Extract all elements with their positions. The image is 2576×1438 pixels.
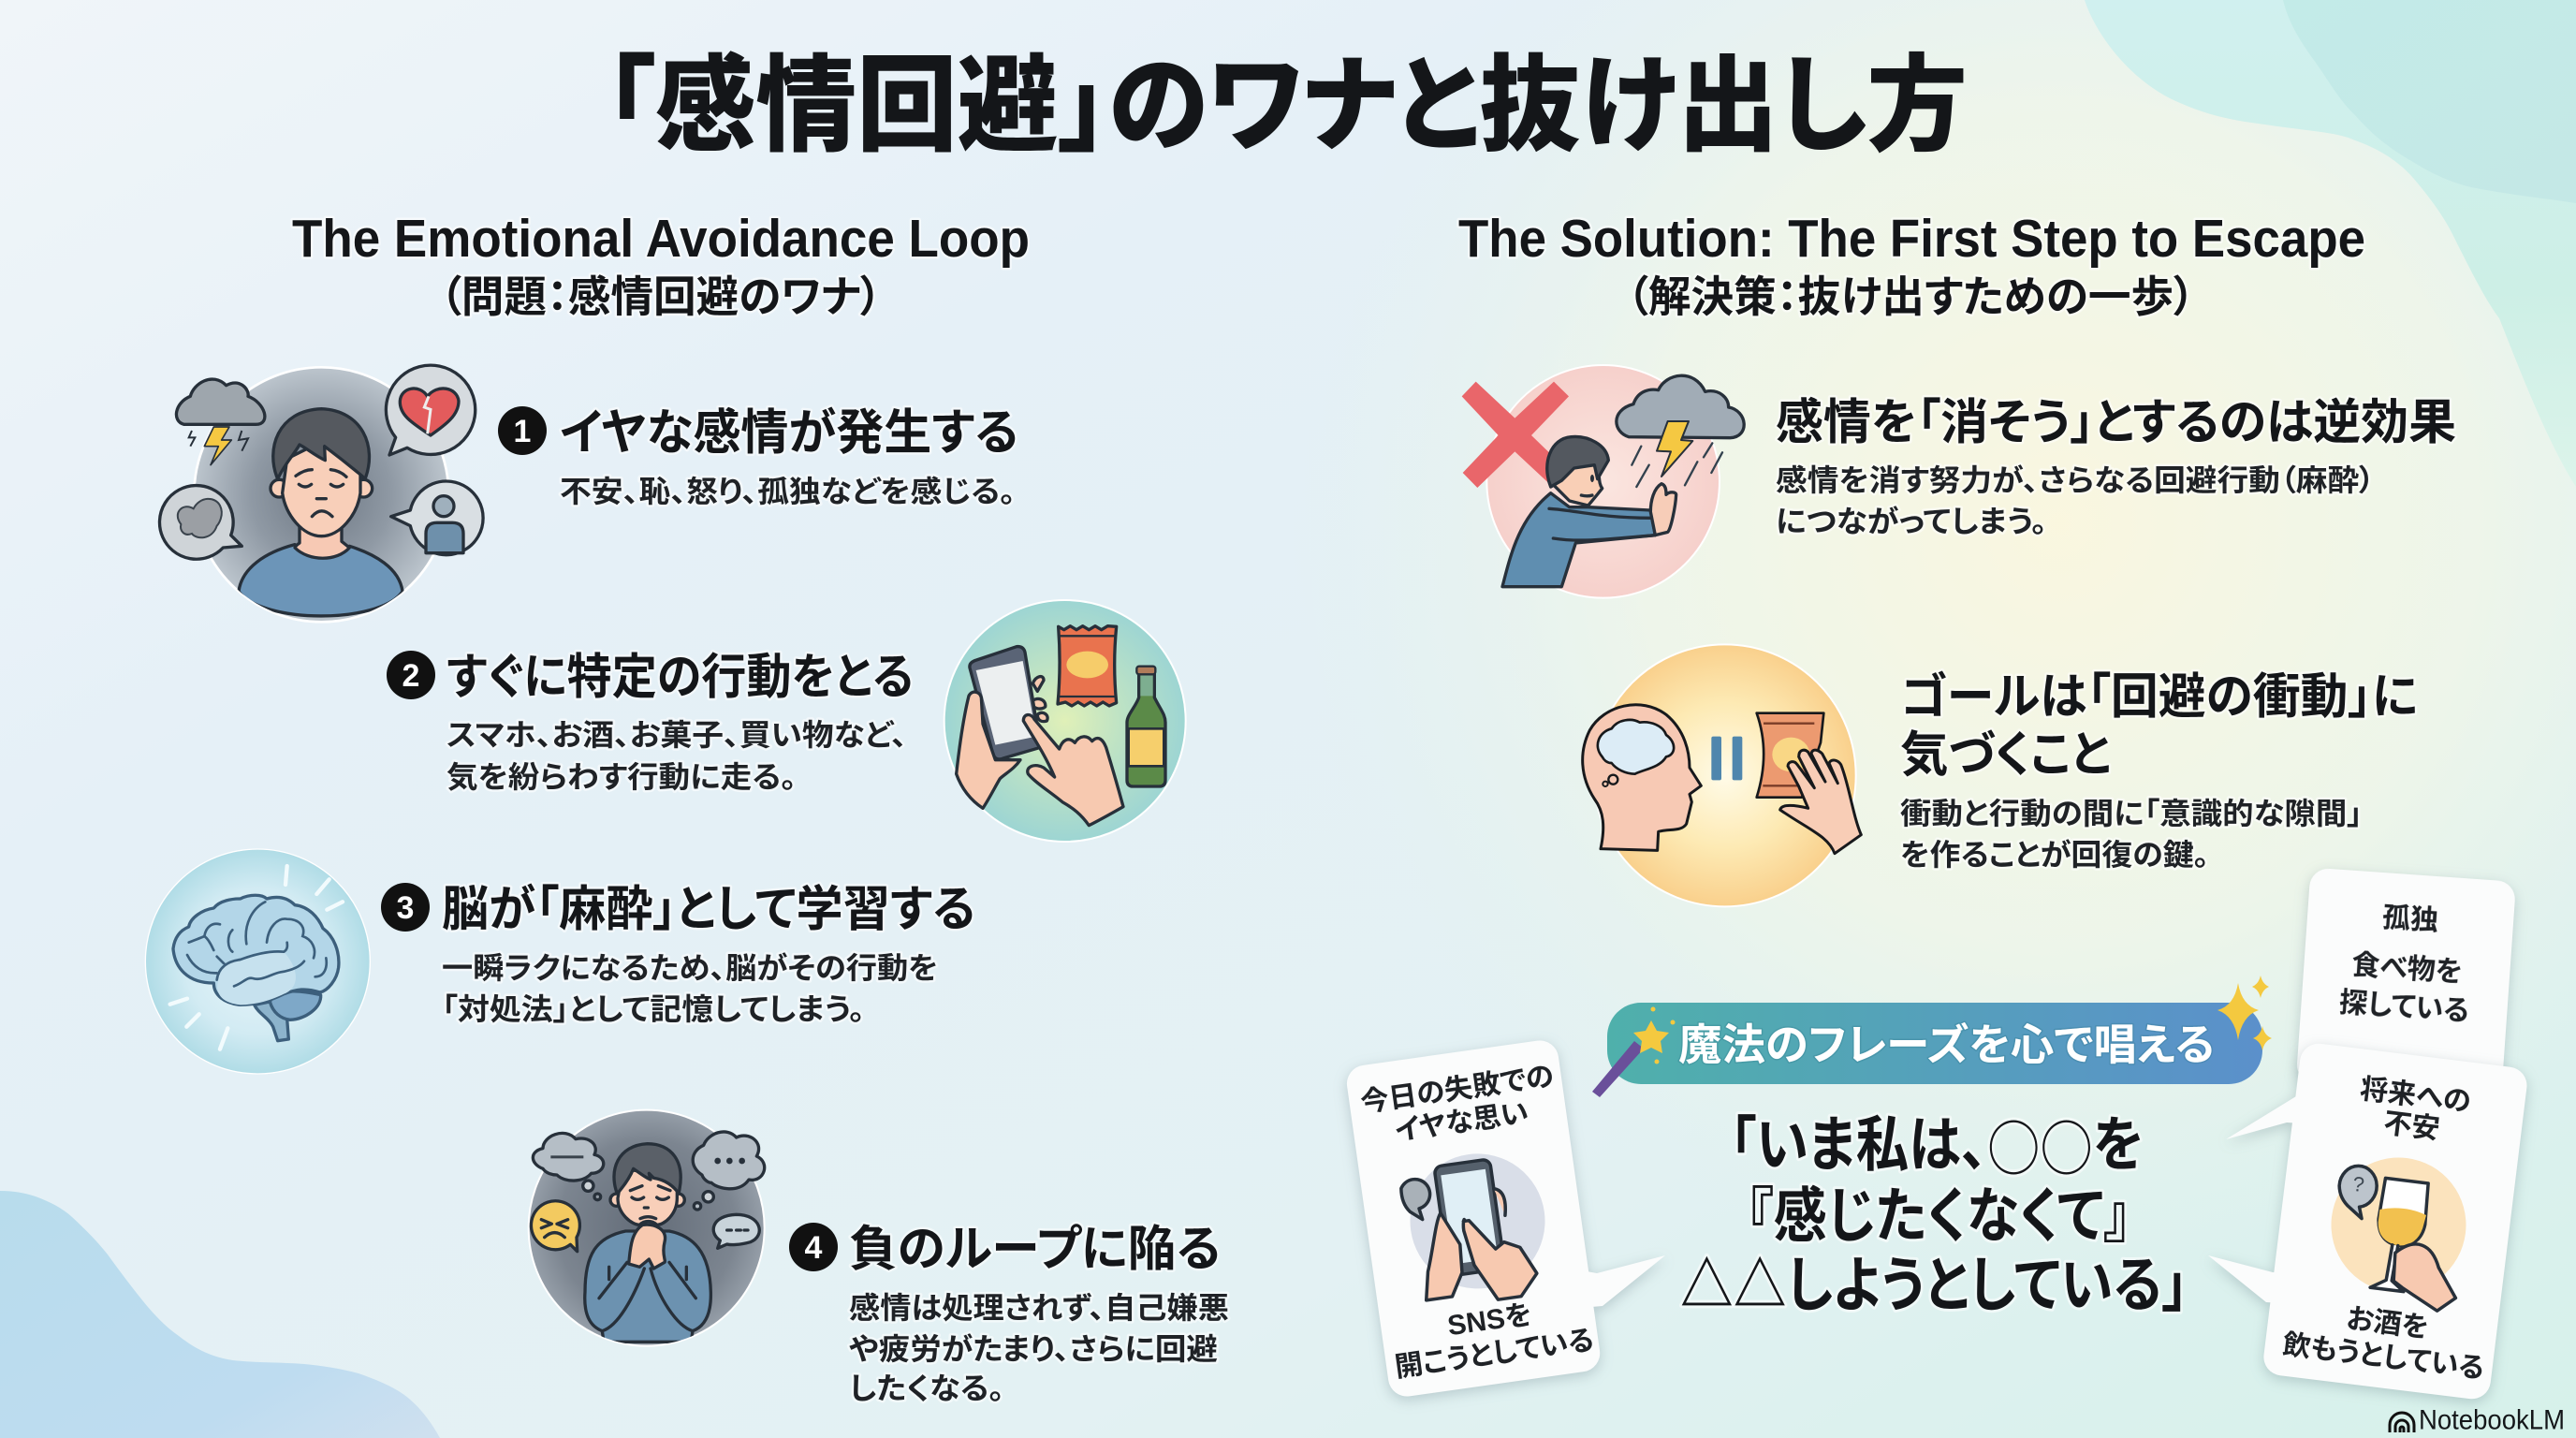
hand [1780,750,1861,854]
callout tails: right card [2208,1096,2310,1303]
card: alcohol example: 不安 [2382,1108,2441,1145]
magic phrase quote: △△しようとしている」 [1680,1252,2188,1319]
icon: wine glass in hand: ? [2351,1172,2365,1196]
solution 1 description: 感情を消す努力が、さらなる回避行動（麻酔） [1776,463,2375,497]
panel: step 2 [387,600,1186,842]
magic phrase quote [1680,1102,2188,1319]
step 4 description: や疲労がたまり、さらに回避 [849,1332,1218,1366]
step 3 description [442,951,938,1026]
step 2 heading: すぐに特定の行動をとる [446,651,914,705]
banner: magic phrase [1592,976,2272,1097]
number badge 3 [381,883,430,932]
left section heading: （問題：感情回避のワナ） [440,272,882,321]
solution 2 description: 衝動と行動の間に「意識的な隙間」 [1900,797,2363,830]
callout tail: left card [1587,1255,1665,1307]
step 1 description: 不安、恥、怒り、孤独などを感じる。 [560,475,1016,508]
bottle [1127,667,1165,786]
icon: broken heart bubble [386,365,476,455]
solution 1 heading: 感情を「消そう」とするのは逆効果 [1776,396,2456,450]
step 2 description [446,718,907,794]
card: loneliness (back): 孤独 [2381,902,2439,937]
right section heading: The Solution: The First Step to Escape [1458,209,2365,269]
card: SNS example: SNSを [1445,1299,1534,1342]
panel: solution 2 [1583,644,2418,906]
step 3 description: 「対処法」として記憶してしまう。 [442,992,865,1026]
title: 「感情回避」のワナと抜け出し方 [605,47,1968,165]
number badge 2 [387,651,435,699]
logo: NotebookLM: NotebookLM [2419,1404,2565,1436]
icon: sad person with bubbles [159,365,483,622]
left section heading: The Emotional Avoidance Loop [292,209,1030,269]
number badge 4: 4 [805,1230,823,1266]
icon: magic wand [1592,1007,1676,1097]
icon: head, pause and snack [1583,644,1861,906]
number badge 1: 1 [514,414,531,449]
step 2 description: 気を紛らわす行動に走る。 [446,760,797,794]
panel: solution 1 [1462,365,2456,598]
solution 2 heading: ゴールは「回避の衝動」に [1900,670,2418,725]
icon: storm cloud [176,379,265,465]
number badge 2: 2 [402,658,419,694]
icon: smoke bubble [159,486,242,559]
step 4 description: したくなる。 [849,1372,1004,1405]
speech bubble [713,1214,759,1248]
snack bag [1757,713,1823,798]
number badge 1 [498,406,547,455]
panel: step 1 [159,365,1018,622]
pause bars [1711,737,1742,780]
card: alcohol example: 飲もうとしている [2281,1329,2486,1385]
icon: worried person with thoughts [529,1110,765,1346]
solution 2 heading [1900,670,2418,783]
solution 1 description: につながってしまう。 [1776,505,2047,538]
step 4 description [849,1291,1229,1405]
panel: step 4 [529,1110,1229,1405]
step 3 description: 一瞬ラクになるため、脳がその行動を [442,951,938,985]
card: loneliness (back) [2296,868,2516,1096]
card: SNS example: 今日の失敗での [1358,1061,1556,1119]
cloud thought right [693,1132,765,1210]
card: alcohol example [2208,1041,2529,1401]
solution 2 heading: 気づくこと [1900,728,2111,783]
phone and hands [957,647,1123,826]
red cross [1462,382,1569,488]
card: alcohol example: 将来への [2358,1074,2472,1118]
number badge 3: 3 [397,890,414,926]
cloud with lightning and rain [1617,375,1744,487]
step 2 description: スマホ、お酒、お菓子、買い物など、 [446,718,907,752]
solution 2 description [1900,797,2363,872]
magic phrase quote: 「いま私は、○○を [1730,1102,2144,1188]
snack bag [1058,626,1117,706]
right section heading [1458,209,2365,321]
icon: wine glass in hand [2322,1150,2474,1313]
solution 1 description [1776,463,2375,538]
step 4 description: 感情は処理されず、自己嫌悪 [849,1291,1229,1325]
card: SNS example: イヤな思い [1393,1097,1530,1147]
step 3 heading: 脳が「麻酔」として学習する [442,883,975,937]
step 4 heading: 負のループに陥る [849,1223,1221,1277]
card: SNS example [1344,1038,1665,1399]
card: loneliness (back): 探している [2338,988,2470,1027]
icon: phone in hands [1398,1145,1556,1311]
number badge 4 [789,1223,838,1271]
card: SNS example: 開こうとしている [1393,1325,1596,1384]
banner: magic phrase: 魔法のフレーズを心で唱える [1678,1020,2215,1069]
icon: lonely figure bubble [391,481,483,555]
icon: person pushing storm cloud [1462,365,1744,598]
icon: glowing brain [145,849,370,1074]
panel: step 3 [145,849,975,1074]
magic phrase quote: 『感じたくなくて』 [1747,1182,2130,1250]
left section heading [292,209,1030,321]
icon: phone, snack and bottle [944,600,1186,842]
right section heading: （解決策：抜け出すための一歩） [1627,272,2195,321]
icon: sparkles [2217,976,2272,1050]
card: loneliness (back): 食べ物を [2350,949,2464,989]
cloud thought left [533,1133,604,1200]
card: alcohol example: お酒を [2345,1303,2430,1344]
solution 2 description: を作ることが回復の鍵。 [1900,838,2209,872]
emoji angry [531,1201,579,1252]
step 1 heading: イヤな感情が発生する [560,406,1018,461]
